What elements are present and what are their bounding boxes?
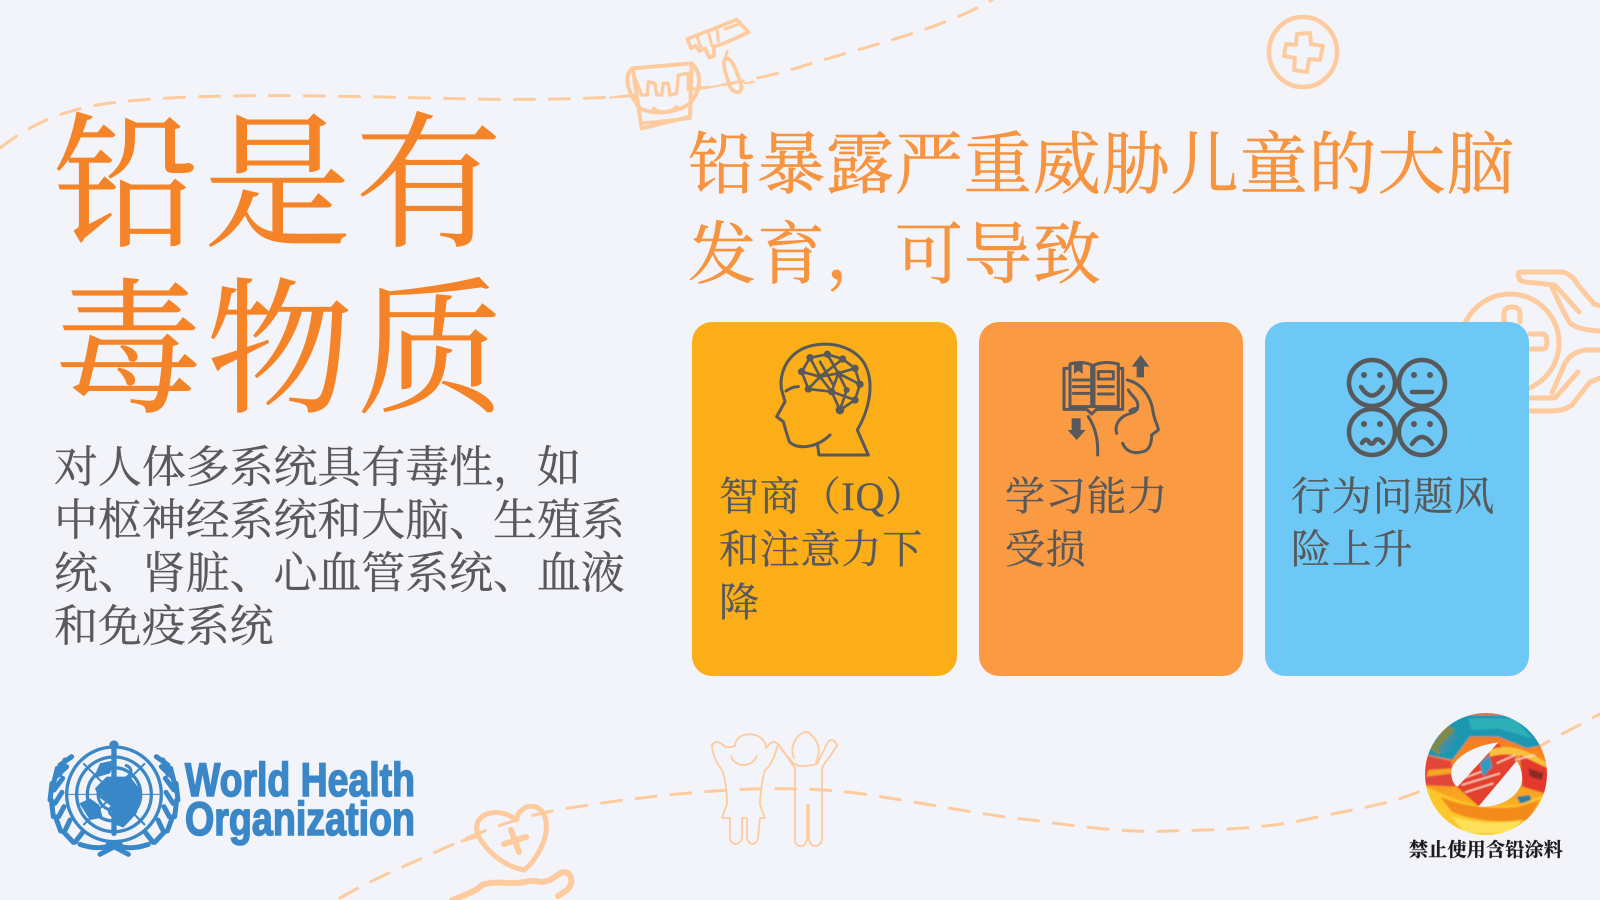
icon: four emotion faces <box>1349 360 1445 455</box>
icon: hands around gear <box>1461 272 1600 411</box>
caption: 禁止使用含铅涂料 <box>1409 839 1563 861</box>
card text <box>719 474 926 625</box>
card text: 学习能力 <box>1005 474 1168 519</box>
body text: 统、肾脏、心血管系统、血液 <box>54 549 625 598</box>
logo: World Health Organization <box>50 740 415 854</box>
dashed path: top <box>0 0 992 148</box>
roller <box>687 20 749 58</box>
icon: head with brain network <box>777 344 870 455</box>
icon: two children <box>712 732 837 846</box>
icon: medical cross circle <box>1269 17 1337 87</box>
logo: no lead paint campaign <box>1409 712 1563 861</box>
heading <box>688 127 1515 293</box>
panel: behaviour <box>1265 322 1529 676</box>
card text: 险上升 <box>1291 527 1413 572</box>
wordmark <box>185 753 415 845</box>
title <box>53 104 508 433</box>
paint ring <box>1422 712 1552 838</box>
dashed path: bottom <box>340 714 1600 898</box>
icon: paint bucket and roller <box>610 20 754 128</box>
panel: IQ <box>692 322 957 676</box>
body text: 对人体多系统具有毒性，如 <box>54 443 581 492</box>
card text: 行为问题风 <box>1291 474 1495 519</box>
heading: 铅暴露严重威胁儿童的大脑 <box>688 127 1515 203</box>
card text: 和注意力下 <box>719 527 923 572</box>
icon: heart with cross <box>462 806 546 870</box>
body text: 中枢神经系统和大脑、生殖系 <box>54 496 625 545</box>
card text: 受损 <box>1005 527 1087 572</box>
emblem <box>50 740 178 854</box>
body text: 和免疫系统 <box>54 602 274 651</box>
paint ring hole <box>1451 742 1522 807</box>
card text <box>1291 474 1495 572</box>
laurel wreath <box>50 757 178 854</box>
card text: 智商（IQ） <box>719 474 926 519</box>
title: 铅是有 <box>53 104 506 267</box>
icon: hand below heart <box>452 872 571 900</box>
heading: 发育，可导致 <box>688 217 1102 293</box>
title: 毒物质 <box>55 270 508 433</box>
wordmark: World Health <box>185 753 415 806</box>
wordmark: Organization <box>185 792 415 845</box>
icon: book, ear and arrows <box>1064 355 1158 455</box>
card text: 降 <box>719 580 760 625</box>
body text <box>54 443 625 651</box>
panel: learning <box>979 322 1243 676</box>
card text <box>1005 474 1168 572</box>
